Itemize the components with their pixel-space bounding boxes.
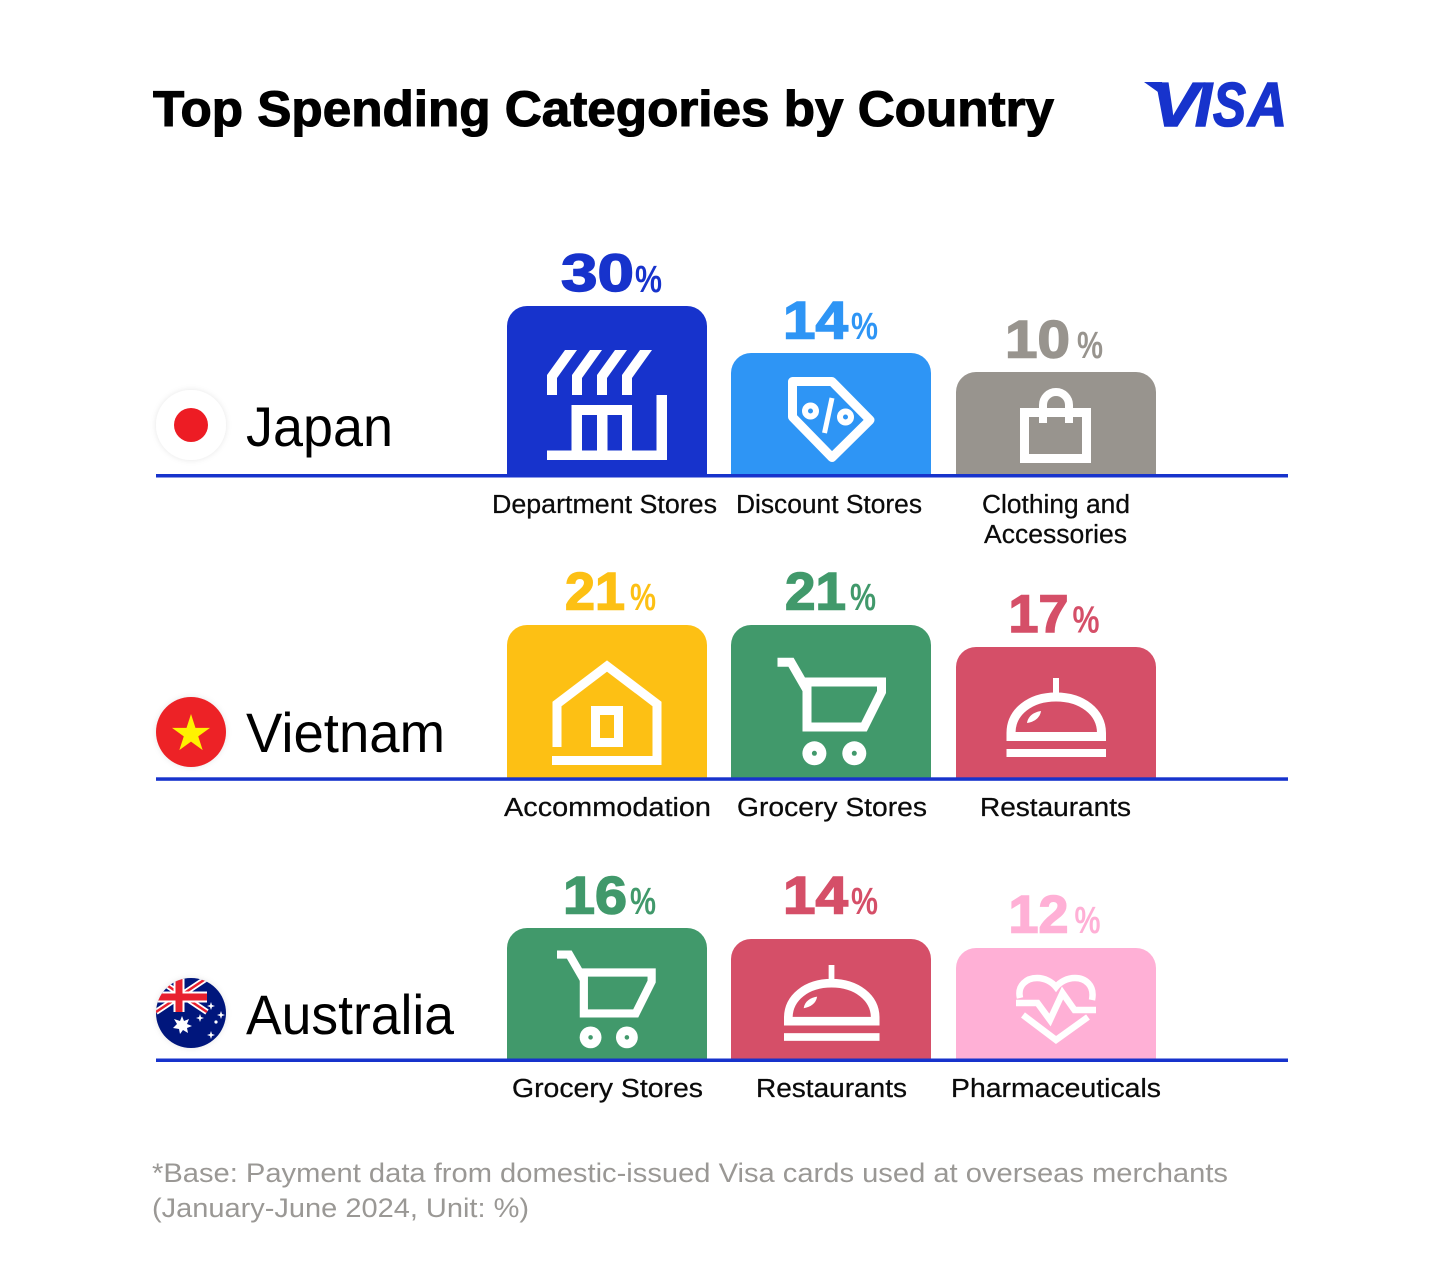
- label: Clothing and Accessories: Clothing and: [982, 491, 1130, 519]
- footnote: (January-June 2024, Unit: %): [152, 1193, 529, 1223]
- icon: Japan flag: [156, 390, 226, 460]
- icon: shopping cart: [557, 955, 652, 1048]
- icon: shopping cart: [778, 662, 882, 765]
- icon: house: [552, 666, 657, 760]
- value: 21%: [565, 562, 656, 622]
- label: Clothing and Accessories: Accessories: [984, 521, 1127, 549]
- label: Restaurants: Restaurants: [756, 1075, 907, 1103]
- value: 21%: %: [630, 577, 656, 619]
- value: 10%: 10: [1005, 310, 1070, 370]
- value: 14%: [783, 866, 878, 926]
- bar: Restaurants: [956, 647, 1156, 779]
- bar: Department Stores: [507, 306, 707, 476]
- panel: Vietnam: [156, 562, 1156, 822]
- value: 14%: %: [851, 881, 878, 923]
- label: Clothing and Accessories: [982, 491, 1130, 549]
- value: 30%: [561, 244, 662, 303]
- bar: Accommodation: [507, 625, 707, 779]
- value: 16%: %: [630, 881, 656, 923]
- icon: Vietnam flag: [156, 697, 226, 767]
- icon: cloche: [784, 965, 880, 1041]
- label: Pharmaceuticals: Pharmaceuticals: [951, 1075, 1161, 1103]
- value: 14%: [783, 292, 878, 350]
- value: 14%: %: [851, 306, 878, 348]
- logo: Visa: [1144, 71, 1287, 140]
- value: 14%: 14: [783, 866, 849, 926]
- value: 30%: 30: [561, 244, 634, 303]
- value: 12%: 12: [1008, 886, 1068, 944]
- label: Department Stores: Department Stores: [492, 491, 717, 519]
- value: 21%: %: [850, 577, 876, 619]
- label: Accommodation: Accommodation: [504, 794, 711, 822]
- value: 21%: [785, 562, 876, 622]
- logo: Visa: A: [1246, 71, 1287, 140]
- logo: Visa: V: [1151, 71, 1204, 140]
- title: Top Spending Categories by Country: [153, 81, 1054, 137]
- bar: Grocery Stores: [731, 625, 931, 779]
- label: Grocery Stores: Grocery Stores: [737, 794, 927, 822]
- icon: shopping bag: [1024, 392, 1086, 458]
- country name: Vietnam: Vietnam: [246, 701, 445, 764]
- logo: Visa: I: [1195, 71, 1214, 140]
- logo: Visa: S: [1213, 71, 1246, 140]
- panel: Japan: [156, 244, 1156, 549]
- label: Grocery Stores: Grocery Stores: [512, 1075, 703, 1103]
- value: 17%: [1008, 585, 1100, 644]
- country name: Japan: Japan: [246, 395, 393, 458]
- country name: Australia: Australia: [246, 983, 455, 1046]
- bar: Pharmaceuticals: [956, 948, 1156, 1060]
- bar: Grocery Stores: [507, 928, 707, 1060]
- panel: Australia: [156, 866, 1161, 1103]
- icon: heart with pulse: [1016, 978, 1096, 1040]
- value: 12%: %: [1074, 900, 1100, 942]
- value: 16%: [563, 866, 656, 926]
- value: 21%: 21: [565, 562, 625, 622]
- icon: Australia flag: [156, 978, 226, 1048]
- label: Discount Stores: Discount Stores: [736, 491, 922, 519]
- bar: Restaurants: [731, 939, 931, 1060]
- icon: discount tag: [792, 382, 870, 458]
- icon: store: [547, 350, 667, 460]
- label: Restaurants: Restaurants: [980, 794, 1131, 822]
- value: 10%: [1005, 310, 1103, 370]
- icon: cloche: [1006, 678, 1106, 757]
- value: 16%: 16: [563, 866, 627, 926]
- value: 12%: [1008, 886, 1100, 944]
- footnote: [152, 1158, 1228, 1223]
- value: 17%: 17: [1008, 585, 1068, 644]
- value: 17%: %: [1072, 600, 1100, 642]
- footnote: *Base: Payment data from domestic-issued Visa cards used at overseas merchants: [152, 1158, 1228, 1188]
- value: 10%: %: [1077, 325, 1103, 367]
- bar: Clothing and Accessories: [956, 372, 1156, 476]
- value: 14%: 14: [783, 292, 849, 350]
- bar: Discount Stores: [731, 353, 931, 476]
- value: 30%: %: [635, 259, 662, 301]
- value: 21%: 21: [785, 562, 846, 622]
